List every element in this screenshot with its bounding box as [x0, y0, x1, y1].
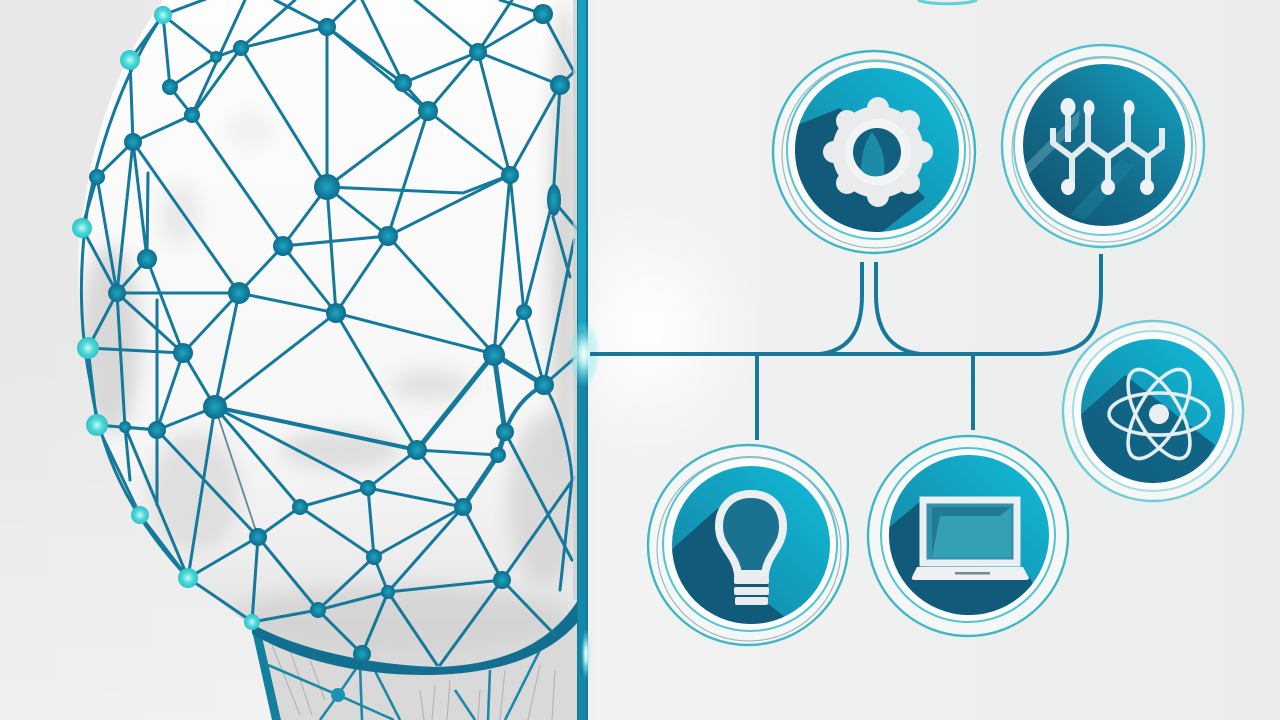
glowing edge nodes: [72, 6, 260, 630]
mesh lines of the head: [81, 0, 578, 665]
connector lines: [590, 254, 1101, 440]
icon: gear: [773, 51, 975, 253]
vertical divider: [568, 0, 600, 720]
neck: [251, 610, 580, 720]
head silhouette: [78, 0, 581, 667]
icon: light bulb: [648, 445, 848, 645]
partial icon circle at top edge: [918, 0, 977, 4]
icon: laptop: [868, 436, 1068, 636]
mesh nodes: [89, 4, 570, 663]
icon: molecule: [1002, 45, 1204, 247]
icon: atom: [1063, 321, 1243, 501]
head lower rim: [252, 600, 578, 675]
